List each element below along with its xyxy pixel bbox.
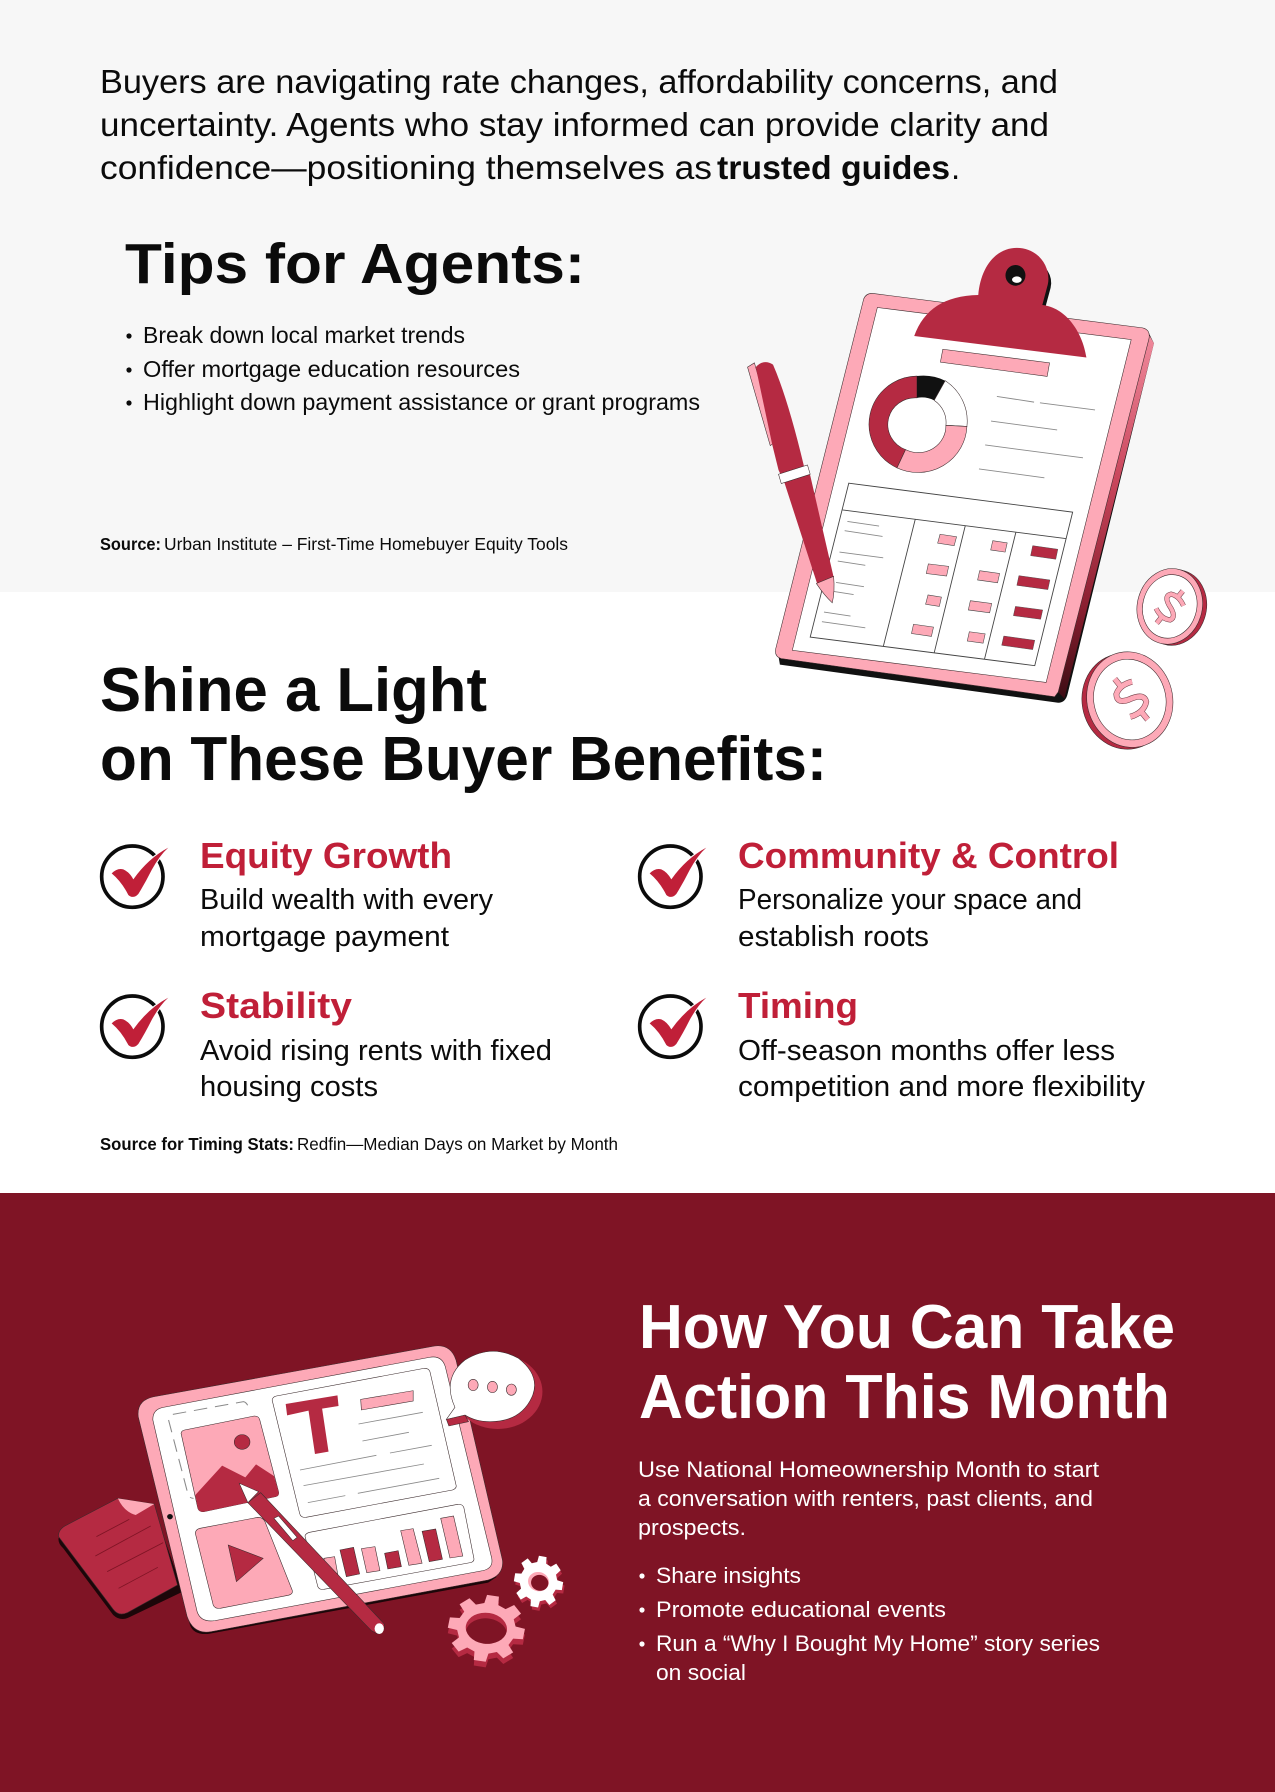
benefit: stability xyxy=(102,985,552,1103)
text lines xyxy=(979,396,1095,478)
data table xyxy=(810,483,1073,666)
tablet body xyxy=(138,1346,503,1634)
panel: buyer benefits xyxy=(100,656,1146,1154)
clipboard clip xyxy=(914,248,1086,357)
benefit: timing: competition and more flexibility xyxy=(738,1071,1146,1103)
benefit: community and control: Community & Control xyxy=(738,835,1119,876)
benefit: equity growth: Build wealth with every xyxy=(200,884,493,916)
gear large xyxy=(441,1590,532,1672)
tips bullet list: Offer mortgage education resources xyxy=(143,356,520,382)
heading: shine a light xyxy=(100,656,827,794)
tips bullet list: Highlight down payment assistance or grant programs xyxy=(143,389,700,415)
title bar xyxy=(940,349,1050,376)
note page xyxy=(58,1498,183,1619)
benefit: stability: Stability xyxy=(200,985,352,1026)
heading: how you can take action xyxy=(639,1293,1175,1432)
coin large xyxy=(1069,639,1186,762)
intro paragraph: . xyxy=(951,149,960,186)
benefit: community and control xyxy=(640,835,1119,953)
dashed frame xyxy=(169,1402,250,1498)
action bullet list: Share insights xyxy=(656,1563,801,1588)
video card xyxy=(195,1517,292,1608)
source note for timing: Source for Timing Stats: xyxy=(100,1134,294,1154)
benefit: equity growth: mortgage payment xyxy=(200,921,449,953)
intro paragraph: confidence—positioning themselves as xyxy=(100,149,712,186)
action paragraph: Use National Homeownership Month to start xyxy=(638,1457,1100,1482)
icon: check xyxy=(640,996,706,1057)
illustration: clipboard with pen and coins xyxy=(748,248,1216,762)
source note for timing xyxy=(100,1134,618,1154)
tips bullet list xyxy=(126,322,700,415)
heading: tips for agents: Tips for Agents: xyxy=(125,232,585,296)
source note: Urban Institute – First-Time Homebuyer Equity Tools xyxy=(164,534,568,554)
image card xyxy=(181,1416,279,1512)
clipboard board xyxy=(775,293,1154,703)
coin small xyxy=(1128,560,1216,654)
benefit: stability: Avoid rising rents with fixed xyxy=(200,1035,552,1067)
heading: shine a light: Shine a Light xyxy=(100,656,487,725)
panel: take action xyxy=(0,1193,1275,1792)
benefit: stability: housing costs xyxy=(200,1071,378,1103)
gear small xyxy=(510,1552,569,1615)
action bullet list: Promote educational events xyxy=(656,1597,946,1622)
source note: Source: xyxy=(100,534,161,554)
benefit: timing xyxy=(640,985,1146,1103)
action paragraph: prospects. xyxy=(638,1515,746,1540)
icon: check xyxy=(640,846,706,907)
stylus xyxy=(239,1483,384,1634)
benefit: equity growth xyxy=(102,835,493,953)
source note for timing: Redfin—Median Days on Market by Month xyxy=(297,1134,618,1154)
icon: check xyxy=(102,996,168,1057)
text panel xyxy=(272,1368,456,1517)
benefit: community and control: Personalize your space and xyxy=(738,884,1082,916)
speech bubble xyxy=(446,1351,542,1429)
benefit: timing: Off-season months offer less xyxy=(738,1035,1115,1067)
donut chart xyxy=(869,376,967,473)
action bullet list xyxy=(639,1563,1100,1685)
benefit: equity growth: Equity Growth xyxy=(200,835,452,876)
intro paragraph: uncertainty. Agents who stay informed can provide clarity and xyxy=(100,106,1049,143)
chart panel xyxy=(305,1504,474,1589)
benefit: community and control: establish roots xyxy=(738,921,929,953)
heading: shine a light: on These Buyer Benefits: xyxy=(100,725,827,794)
benefit: timing: Timing xyxy=(738,985,858,1026)
illustration: tablet with pen, note and gears xyxy=(58,1346,569,1672)
intro paragraph: trusted guides xyxy=(717,149,950,186)
intro paragraph: Buyers are navigating rate changes, affordability concerns, and xyxy=(100,63,1058,100)
heading: how you can take action: Action This Month xyxy=(639,1363,1170,1432)
tips bullet list: Break down local market trends xyxy=(143,322,465,348)
icon: check xyxy=(102,846,168,907)
panel: intro and tips xyxy=(0,0,1275,592)
pen xyxy=(748,362,834,603)
heading: how you can take action: How You Can Take xyxy=(639,1293,1175,1362)
action paragraph xyxy=(638,1457,1100,1540)
action bullet list: on social xyxy=(656,1660,746,1685)
action bullet list: Run a “Why I Bought My Home” story series xyxy=(656,1631,1100,1656)
action paragraph: a conversation with renters, past clients, and xyxy=(638,1486,1093,1511)
intro paragraph xyxy=(100,63,1058,186)
